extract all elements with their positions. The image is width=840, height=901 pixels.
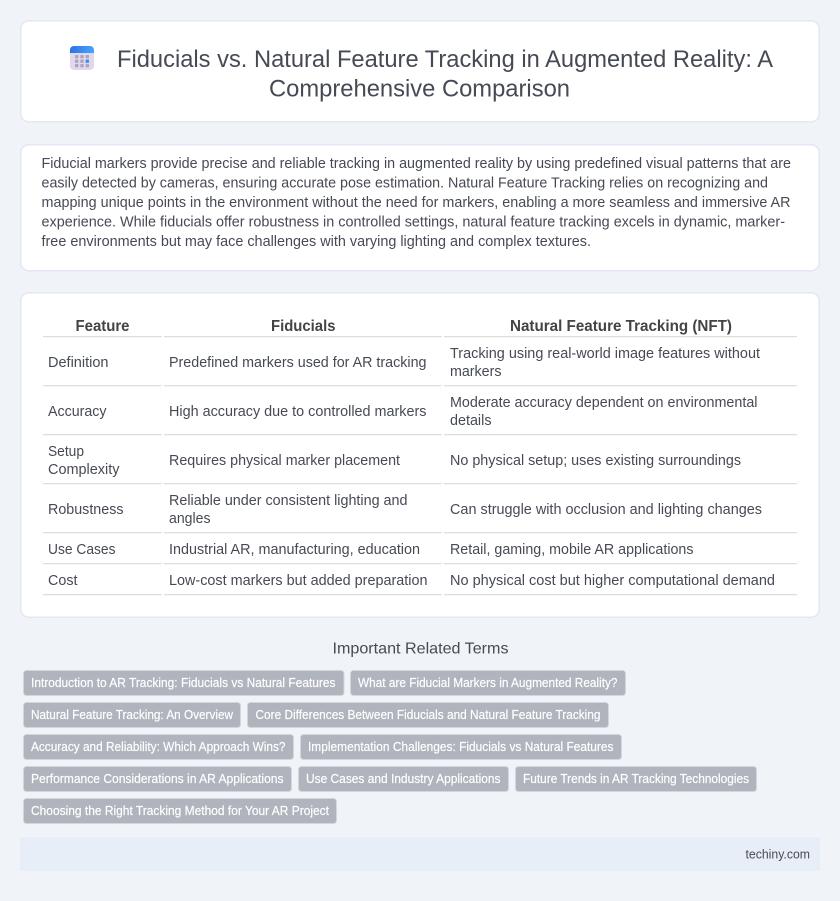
footer — [20, 837, 820, 871]
title: Fiducials vs. Natural Feature Tracking in Augmented Reality: A — [117, 46, 773, 73]
related term chips: Use Cases and Industry Applications — [306, 772, 500, 786]
related term chips — [24, 670, 756, 824]
row: accuracy — [48, 395, 758, 429]
row: robustness: Can struggle with occlusion and lighting changes — [450, 502, 762, 518]
text block: introduction: mapping unique points in the environment without the need for markers, enabling a more seamless and immersive AR — [42, 195, 790, 211]
row: definition: Predefined markers used for AR tracking — [169, 355, 426, 371]
text block: introduction — [42, 156, 791, 250]
related term chips: Introduction to AR Tracking: Fiducials vs Natural Features — [31, 676, 336, 690]
heading: important related terms: Important Related Terms — [332, 640, 508, 658]
related term chips: Accuracy and Reliability: Which Approach Wins? — [31, 740, 286, 754]
title — [117, 46, 773, 102]
related term chips: What are Fiducial Markers in Augmented Reality? — [358, 676, 618, 690]
row: use cases — [48, 542, 694, 558]
text block: introduction: free environments but may face challenges with varying lighting and complex textures. — [42, 234, 591, 250]
table header row — [76, 318, 732, 335]
row: robustness: Robustness — [48, 502, 124, 518]
title: Comprehensive Comparison — [269, 76, 570, 102]
related term chips: Implementation Challenges: Fiducials vs Natural Features — [308, 740, 614, 754]
row: robustness: Reliable under consistent lighting and — [169, 493, 408, 509]
row: cost — [48, 573, 775, 589]
row: use cases: Retail, gaming, mobile AR applications — [450, 542, 694, 558]
row: robustness — [48, 493, 762, 527]
row: use cases: Use Cases — [48, 542, 116, 558]
row: use cases: Industrial AR, manufacturing, education — [169, 542, 420, 558]
row: setup complexity: No physical setup; uses existing surroundings — [450, 453, 741, 469]
row: definition: Tracking using real-world image features without — [450, 346, 760, 362]
row: accuracy: High accuracy due to controlled markers — [169, 404, 426, 420]
icon: calendar — [70, 46, 94, 70]
text block: introduction: experience. While fiducials offer robustness in controlled settings, natural feature tracking excels in dynamic, marker- — [42, 214, 785, 230]
panel: introduction — [21, 145, 819, 271]
related term chips: Natural Feature Tracking: An Overview — [31, 708, 234, 722]
table header row: Fiducials — [271, 318, 336, 335]
row: definition: markers — [450, 364, 502, 380]
related term chips: Future Trends in AR Tracking Technologies — [523, 772, 749, 786]
related term chips: Choosing the Right Tracking Method for Your AR Project — [31, 804, 329, 818]
panel: header — [21, 21, 819, 122]
text block: introduction: easily detected by cameras, ensuring accurate pose estimation. Natural Feature Tracking relies on recognizing and — [42, 176, 768, 192]
row: robustness: angles — [169, 511, 210, 527]
row: setup complexity: Setup — [48, 444, 84, 460]
row: cost: No physical cost but higher computational demand — [450, 573, 775, 589]
related term chips: Core Differences Between Fiducials and Natural Feature Tracking — [256, 708, 601, 722]
panel: comparison table — [21, 293, 819, 617]
table header row: Feature — [76, 318, 130, 335]
row: setup complexity — [48, 444, 741, 478]
row: definition — [48, 346, 760, 380]
row: accuracy: details — [450, 413, 492, 429]
row: accuracy: Moderate accuracy dependent on environmental — [450, 395, 758, 411]
row: cost: Low-cost markers but added preparation — [169, 573, 428, 589]
row: setup complexity: Complexity — [48, 462, 120, 478]
row: definition: Definition — [48, 355, 108, 371]
table header row: Natural Feature Tracking (NFT) — [510, 318, 732, 335]
related term chips: Performance Considerations in AR Applications — [31, 772, 284, 786]
row: accuracy: Accuracy — [48, 404, 107, 420]
text block: introduction: Fiducial markers provide precise and reliable tracking in augmented reality by using predefined visual patterns that are — [42, 156, 791, 172]
footer: techiny.com — [746, 846, 810, 862]
row: setup complexity: Requires physical marker placement — [169, 453, 400, 469]
row: cost: Cost — [48, 573, 78, 589]
